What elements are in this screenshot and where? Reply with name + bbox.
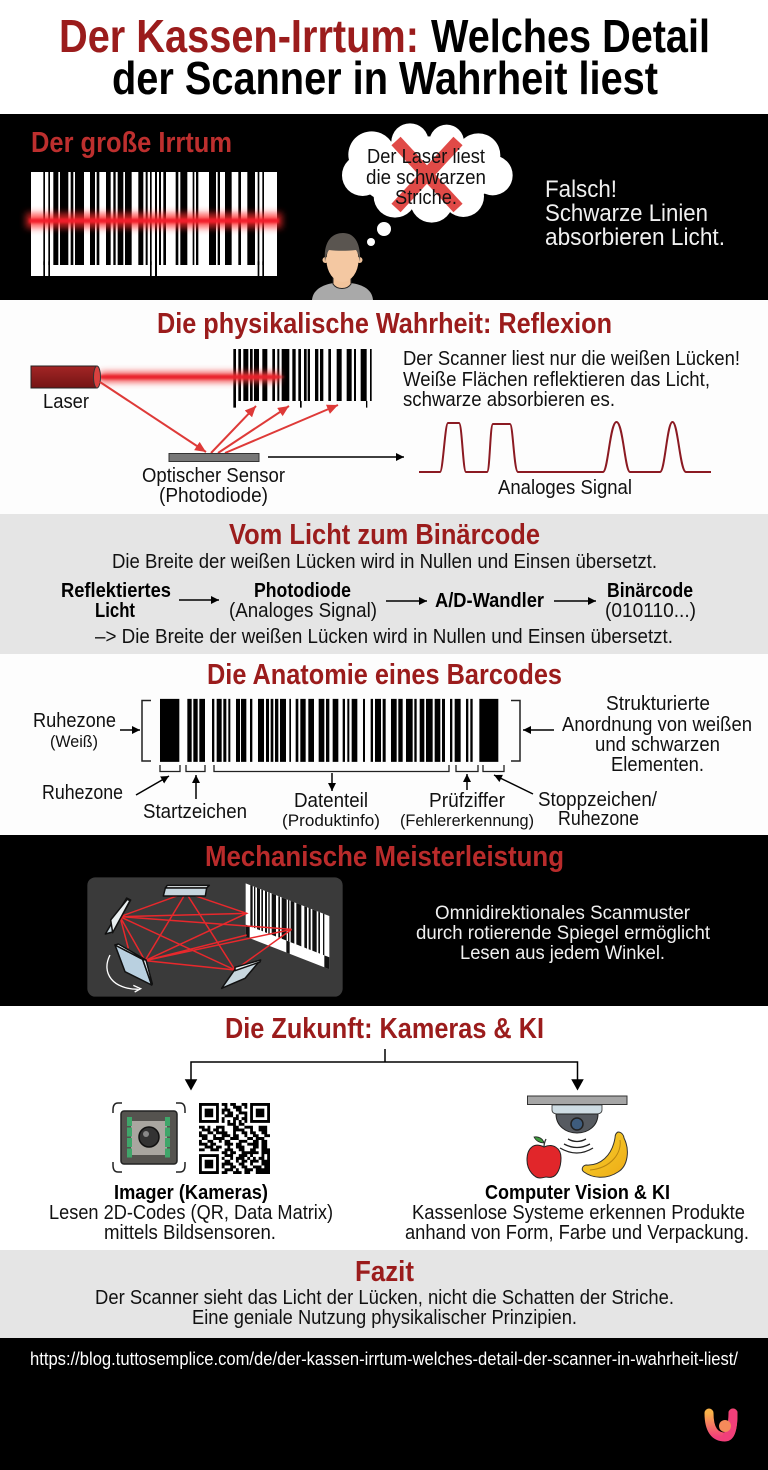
heading: Zukunft: Die Zukunft: Kameras & KI <box>225 1013 544 1045</box>
apple <box>527 1145 561 1178</box>
icon: ceiling camera with produce <box>527 1096 627 1178</box>
icon: QR code <box>199 1103 273 1174</box>
text: structured arrangement: Anordnung von weißen <box>562 714 752 736</box>
icon: optical sensor <box>169 454 259 462</box>
arrow 3 <box>554 600 596 602</box>
heading: Anatomie: Die Anatomie eines Barcodes <box>207 659 562 691</box>
text: scan pattern: durch rotierende Spiegel ermöglicht <box>416 923 711 944</box>
text: imager <box>49 1182 333 1244</box>
heading: Reflexion: Die physikalische Wahrheit: Reflexion <box>157 308 612 340</box>
title: der Scanner in Wahrheit liest <box>112 52 658 104</box>
heading: der große Irrtum: Der große Irrtum <box>31 127 232 159</box>
subtitle: Die Breite der weißen Lücken wird in Nullen und Einsen übersetzt. <box>112 551 657 573</box>
flow: photodiode: Photodiode <box>254 580 351 602</box>
flow: reflected light <box>61 580 171 622</box>
label: Laser: Laser <box>43 391 89 413</box>
bubble text <box>366 146 486 209</box>
footer <box>0 1338 768 1470</box>
banana <box>582 1132 627 1177</box>
text: reflection explanation <box>403 348 740 411</box>
label: Datenteil: (Produktinfo) <box>282 812 380 830</box>
brackets <box>142 700 520 761</box>
text: reflection explanation: schwarze absorbieren es. <box>403 389 615 411</box>
label: Ruhezone: Ruhezone <box>42 782 123 804</box>
tree connector arrows <box>186 1049 582 1089</box>
label: Prüfziffer <box>400 790 534 830</box>
label: Datenteil: Datenteil <box>294 790 368 812</box>
icon: camera sensor <box>113 1103 185 1172</box>
flow: reflected light: Licht <box>95 600 135 622</box>
label: Ruhezone Weiß: Ruhezone <box>33 710 116 732</box>
bubble text: Striche. <box>395 187 457 209</box>
text: imager: Lesen 2D-Codes (QR, Data Matrix) <box>49 1202 333 1224</box>
text: computer vision <box>405 1182 749 1244</box>
text: computer vision: Computer Vision & KI <box>485 1182 670 1204</box>
panel: Vom Licht zum Binärcode <box>0 514 768 654</box>
red cross <box>396 141 458 208</box>
label: Ruhezone Weiß <box>33 710 116 751</box>
label: optical sensor <box>142 465 285 507</box>
text: conclusion: Der Scanner sieht das Licht der Lücken, nicht die Schatten der Striche. <box>95 1287 674 1309</box>
label: Prüfziffer: (Fehlererkennung) <box>400 812 534 830</box>
arrow 1 <box>179 599 219 601</box>
text: reflection explanation: Der Scanner liest nur die weißen Lücken! <box>403 348 740 370</box>
annotation arrows <box>120 730 554 799</box>
label: analog signal: Analoges Signal <box>498 477 632 499</box>
flow: binary code: Binärcode <box>607 580 693 602</box>
mirrors <box>105 885 261 988</box>
flow: reflected light: Reflektiertes <box>61 580 171 602</box>
text: Falsch: Schwarze Linien <box>545 200 708 227</box>
panel: Anatomie eines Barcodes <box>0 654 768 835</box>
barcode with laser line <box>26 172 282 276</box>
title <box>59 10 710 104</box>
label: optical sensor: (Photodiode) <box>159 485 268 507</box>
panel: physikalische Wahrheit <box>0 300 768 514</box>
label: Ruhezone Weiß: (Weiß) <box>50 733 98 751</box>
waves <box>560 1139 593 1153</box>
bubble text: Der Laser liest <box>367 146 485 168</box>
barcode <box>160 636 502 825</box>
heading: Binärcode: Vom Licht zum Binärcode <box>229 519 540 551</box>
text: Falsch: absorbieren Licht. <box>545 224 725 251</box>
label: Stoppzeichen: Stoppzeichen/ <box>538 789 657 811</box>
text: computer vision: Kassenlose Systeme erkennen Produkte <box>412 1202 745 1224</box>
text: scan pattern <box>416 903 711 964</box>
text: structured arrangement: Strukturierte <box>606 693 710 715</box>
label: Startzeichen: Startzeichen <box>143 801 247 823</box>
flow: photodiode <box>229 580 377 622</box>
thought bubble <box>342 123 513 246</box>
arrow to signal <box>268 456 404 458</box>
text: imager: mittels Bildsensoren. <box>104 1222 276 1244</box>
icon: laser <box>31 366 100 388</box>
text: structured arrangement: Elementen. <box>611 754 704 776</box>
heading: Mechanik: Mechanische Meisterleistung <box>205 841 564 873</box>
text: structured arrangement: und schwarzen <box>595 734 720 756</box>
flow: A/D converter: A/D-Wandler <box>435 590 544 612</box>
sub-brackets <box>160 765 504 772</box>
text: Falsch: Falsch! <box>545 176 617 203</box>
arrow 2 <box>386 600 427 602</box>
text: conclusion <box>95 1287 674 1329</box>
text: scan pattern: Omnidirektionales Scanmuster <box>435 903 691 924</box>
text: structured arrangement <box>562 693 752 776</box>
laser beam <box>100 372 285 382</box>
flow: photodiode: (Analoges Signal) <box>229 600 377 622</box>
icon: logo <box>709 1413 733 1437</box>
laser lines <box>120 893 292 970</box>
reflection arrows <box>100 382 338 453</box>
heading: Fazit: Fazit <box>355 1256 414 1288</box>
title: Der Kassen-Irrtum: <box>59 10 419 62</box>
text: scan pattern: Lesen aus jedem Winkel. <box>460 943 665 964</box>
label: Stoppzeichen <box>538 789 657 830</box>
title: Welches Detail <box>431 10 710 62</box>
panel: Mechanische Meisterleistung <box>0 835 768 1006</box>
conclusion line: –> Die Breite der weißen Lücken wird in Nullen und Einsen übersetzt. <box>95 626 673 648</box>
chart: analog signal <box>419 422 711 472</box>
diagram: rotating mirrors <box>87 877 343 997</box>
text: imager: Imager (Kameras) <box>114 1182 268 1204</box>
label: Stoppzeichen: Ruhezone <box>558 808 639 830</box>
barcode on diagram <box>246 883 329 969</box>
panel: Die Zukunft <box>50 1017 748 1243</box>
barcode <box>233 375 372 408</box>
flow: binary code <box>605 580 696 622</box>
rotation arrow <box>107 955 141 992</box>
flow: binary code: (010110...) <box>605 600 696 622</box>
text: reflection explanation: Weiße Flächen reflektieren das Licht, <box>403 369 710 391</box>
icon: thinking person <box>312 233 373 300</box>
panel: der große Irrtum <box>0 114 768 300</box>
panel: Fazit <box>0 1250 768 1338</box>
label: Prüfziffer: Prüfziffer <box>429 790 505 812</box>
text: Falsch <box>545 176 725 251</box>
text: conclusion: Eine geniale Nutzung physikalischer Prinzipien. <box>192 1307 577 1329</box>
bubble text: die schwarzen <box>366 167 486 189</box>
label: Datenteil <box>282 790 380 830</box>
label: optical sensor: Optischer Sensor <box>142 465 285 487</box>
